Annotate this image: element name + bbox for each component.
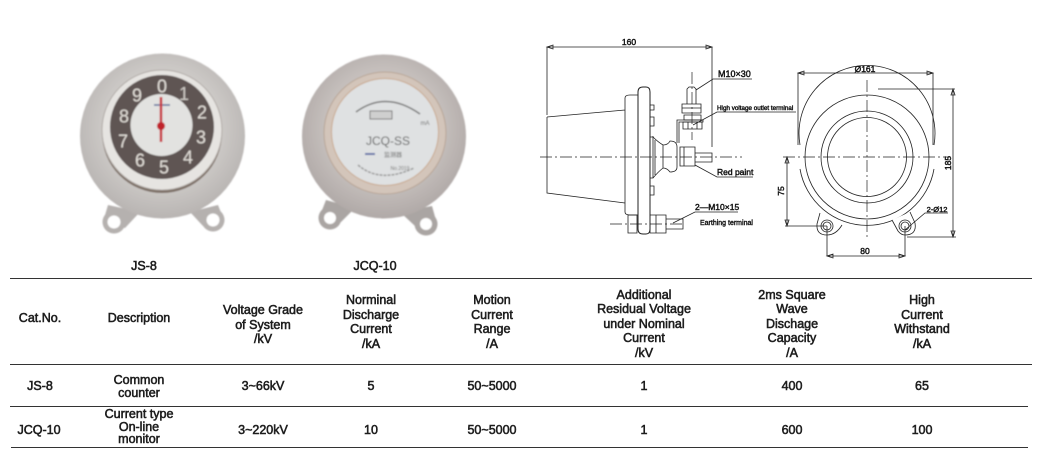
column header: High current withstand: Withstand bbox=[894, 322, 950, 336]
column header: High current withstand: High bbox=[909, 293, 935, 307]
column header: Nominal discharge current: Norminal bbox=[346, 293, 396, 307]
bezel bbox=[324, 72, 446, 194]
right lug bbox=[892, 212, 915, 235]
counter window bbox=[370, 111, 392, 119]
bezel shadow bbox=[102, 73, 222, 193]
dial numerals: 1 bbox=[179, 84, 189, 104]
housing body bbox=[547, 95, 638, 215]
concentric circles bbox=[799, 65, 935, 225]
model text: JCQ-SS bbox=[366, 134, 410, 148]
maker line bbox=[358, 165, 414, 175]
dial numerals: 3 bbox=[196, 128, 206, 148]
height dimension 185: 185 bbox=[943, 156, 953, 170]
top bolt bbox=[682, 87, 702, 129]
row: JS-8: 3~66kV bbox=[242, 379, 285, 393]
caption JS-8: JS-8 bbox=[131, 259, 157, 273]
label: M10x30: M10×30 bbox=[718, 69, 751, 79]
label: 2-M10x15 bbox=[673, 202, 739, 223]
photo: JCQ-10 monitor bbox=[302, 54, 466, 236]
red paint terminal bbox=[680, 147, 712, 166]
label: high voltage outlet terminal: High voltage outlet terminal bbox=[717, 105, 793, 112]
blue tick bbox=[154, 104, 170, 106]
dimension 75: 75 bbox=[776, 186, 786, 196]
label: earthing terminal: Earthing terminal bbox=[700, 220, 753, 227]
column header: 2ms square wave: 2ms Square bbox=[758, 288, 826, 302]
row: JS-8: JS-8 bbox=[27, 379, 53, 393]
maker text: 监测器 bbox=[384, 151, 402, 159]
row: JCQ-10: Current type bbox=[105, 407, 173, 421]
base plate bbox=[302, 54, 466, 218]
diameter dimension bbox=[798, 64, 933, 145]
row: JS-8: 50~5000 bbox=[467, 379, 517, 393]
column header: 2ms square wave: Wave bbox=[776, 302, 808, 316]
dial numerals: 6 bbox=[135, 150, 145, 170]
label: 2-O12 holes: 2-Ø12 bbox=[927, 205, 947, 214]
product captions bbox=[131, 259, 397, 273]
dial numerals: 2 bbox=[197, 102, 207, 122]
left lug bbox=[817, 213, 842, 235]
insulator bbox=[650, 136, 677, 178]
photo: JS-8 counter bbox=[80, 54, 245, 234]
mounting lugs bbox=[102, 205, 224, 234]
overall dimension 160: 160 bbox=[622, 37, 636, 47]
column header: Nominal discharge current: Current bbox=[350, 322, 392, 336]
dial numerals: 7 bbox=[118, 132, 128, 152]
row: JCQ-10: On-line bbox=[119, 420, 159, 434]
small print: No.2019 bbox=[391, 166, 410, 172]
row: JCQ-10: 3~220kV bbox=[238, 423, 289, 437]
column header: Motion current range: Current bbox=[471, 308, 513, 322]
table rules bbox=[10, 278, 1032, 448]
red needle bbox=[157, 97, 165, 142]
label: high voltage outlet terminal bbox=[693, 105, 796, 125]
column header: Voltage Grade: of System bbox=[235, 318, 291, 332]
dimension 80: 80 bbox=[860, 246, 870, 256]
label: 2-M10x15: 2—M10×15 bbox=[695, 202, 739, 212]
column header: Additional residual voltage: Current bbox=[623, 331, 665, 345]
meter face bbox=[332, 78, 438, 186]
column header: High current withstand: /kA bbox=[913, 337, 932, 351]
row: JCQ-10: 600 bbox=[782, 423, 802, 437]
column header: 2ms square wave: Capacity bbox=[768, 331, 817, 345]
mA label: mA bbox=[420, 121, 430, 127]
dimension 75 bbox=[776, 157, 827, 226]
centre lines bbox=[783, 80, 950, 237]
column header: Voltage Grade: /kV bbox=[254, 332, 273, 346]
row: JS-8 bbox=[27, 373, 929, 400]
row: JCQ-10: monitor bbox=[118, 432, 160, 446]
column header: Additional residual voltage: Residual Voltage bbox=[597, 302, 691, 316]
row: JS-8: counter bbox=[118, 386, 160, 400]
column header: Motion current range: Motion bbox=[473, 293, 511, 307]
row: JS-8: 65 bbox=[915, 379, 929, 393]
bracket bbox=[677, 120, 703, 143]
column header: Voltage Grade: Voltage Grade bbox=[223, 303, 303, 317]
front view drawing bbox=[776, 64, 956, 258]
column header: Additional residual voltage bbox=[597, 288, 691, 360]
mounting lugs bbox=[318, 200, 438, 236]
column header: Motion current range bbox=[471, 293, 513, 351]
column header: High current withstand: Current bbox=[901, 308, 943, 322]
column header: Nominal discharge current bbox=[343, 293, 399, 351]
meter arc bbox=[356, 101, 420, 114]
column header: Cat.No.: Cat.No. bbox=[19, 311, 61, 325]
label: red paint: Red paint bbox=[717, 167, 754, 177]
height dimension 185 bbox=[878, 89, 956, 237]
dial numerals: 5 bbox=[159, 158, 169, 178]
column header: High current withstand bbox=[894, 293, 950, 351]
row: JCQ-10: 100 bbox=[912, 423, 932, 437]
row: JS-8: 400 bbox=[782, 379, 802, 393]
base plate bbox=[80, 54, 245, 218]
dial numerals: 0 bbox=[157, 76, 167, 96]
flange bbox=[638, 87, 650, 234]
row: JS-8: 5 bbox=[368, 379, 375, 393]
caption JCQ-10: JCQ-10 bbox=[353, 259, 397, 273]
diameter dimension: Ø161 bbox=[855, 64, 876, 74]
row: JCQ-10: 10 bbox=[364, 423, 378, 437]
row: JS-8: Common bbox=[114, 373, 164, 387]
dimension 80 bbox=[827, 226, 905, 258]
column header: Motion current range: Range bbox=[474, 322, 510, 336]
column header: Additional residual voltage: /kV bbox=[635, 346, 654, 360]
overall dimension 160 bbox=[547, 37, 712, 147]
side view drawing bbox=[540, 37, 796, 234]
row: JCQ-10: JCQ-10 bbox=[17, 423, 61, 437]
dial numerals bbox=[118, 76, 207, 178]
label: M10x30 bbox=[696, 69, 752, 90]
label: red paint bbox=[695, 165, 754, 177]
row: JCQ-10: 50~5000 bbox=[467, 423, 517, 437]
column header: 2ms square wave: /A bbox=[786, 346, 799, 360]
centre lines bbox=[540, 72, 742, 224]
dial numerals: 9 bbox=[132, 86, 142, 106]
white centre bbox=[130, 94, 192, 156]
column header: Additional residual voltage: Additional bbox=[617, 288, 671, 302]
blue mark bbox=[365, 153, 375, 155]
flange bolts bbox=[650, 105, 654, 195]
column header: Additional residual voltage: under Nominal bbox=[603, 317, 685, 331]
black dial bbox=[110, 75, 214, 179]
column header: 2ms square wave bbox=[758, 288, 826, 360]
column header: Nominal discharge current: Discharge bbox=[343, 308, 399, 322]
dial numerals: 4 bbox=[183, 148, 193, 168]
earthing terminal bbox=[628, 215, 683, 233]
column header: Voltage Grade bbox=[223, 303, 303, 346]
specification table bbox=[10, 278, 1032, 448]
column header: Nominal discharge current: /kA bbox=[362, 337, 381, 351]
column header: 2ms square wave: Dischage bbox=[766, 317, 818, 331]
column header: Description: Description bbox=[108, 311, 170, 325]
label: 2-O12 holes bbox=[905, 205, 948, 230]
row: JS-8: 1 bbox=[641, 379, 648, 393]
column header: Motion current range: /A bbox=[486, 337, 499, 351]
bezel bbox=[102, 70, 222, 190]
row: JCQ-10 bbox=[17, 407, 932, 446]
dial numerals: 8 bbox=[119, 106, 129, 126]
row: JCQ-10: 1 bbox=[641, 423, 648, 437]
